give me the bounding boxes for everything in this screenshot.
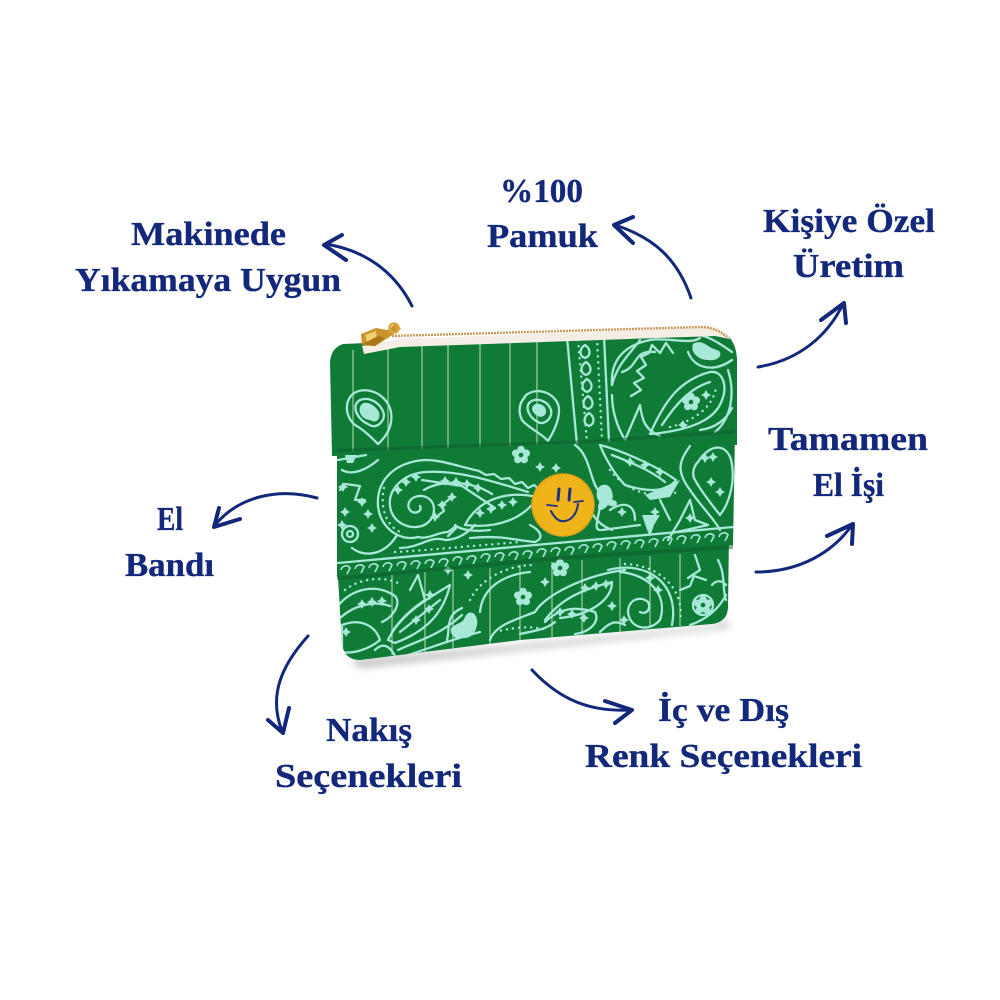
title: Kişiye Özel Üretim: Üretim: [793, 248, 904, 285]
arrow: to Nakış Seçenekleri: [268, 636, 308, 733]
right motifs: [575, 445, 733, 540]
zipper pull: [361, 323, 401, 346]
arrow: to %100 Pamuk: [614, 217, 691, 298]
title: İç ve Dış Renk Seçenekleri: Renk Seçenekleri: [585, 738, 862, 775]
title: Makinede Yıkamaya Uygun: Yıkamaya Uygun: [75, 262, 341, 299]
title: İç ve Dış Renk Seçenekleri: İç ve Dış: [658, 691, 789, 729]
leaf motif: [436, 495, 537, 536]
title: %100 Pamuk: %100: [500, 173, 583, 210]
arrow: to İç ve Dış Renk Seçenekleri: [532, 670, 632, 723]
title: %100 Pamuk: Pamuk: [487, 218, 598, 255]
embroidered smiley patch: [532, 474, 594, 536]
title: El Bandı: [125, 501, 214, 584]
arrow: to Makinede Yıkamaya Uygun: [324, 235, 412, 306]
title: Kişiye Özel Üretim: Kişiye Özel: [763, 203, 935, 240]
title: İç ve Dış Renk Seçenekleri: [585, 691, 862, 775]
title: El Bandı: El: [157, 501, 183, 538]
title: Nakış Seçenekleri: Nakış: [326, 712, 412, 749]
large paisley with spiral: [378, 460, 540, 538]
title: Makinede Yıkamaya Uygun: Makinede: [131, 216, 286, 253]
arrow: to El Bandı: [214, 494, 317, 527]
lower pocket: [337, 535, 729, 660]
title: Tamamen El İşi: El İşi: [813, 466, 884, 504]
title: Nakış Seçenekleri: Seçenekleri: [275, 758, 462, 795]
title: Nakış Seçenekleri: [275, 712, 462, 795]
title: Tamamen El İşi: [768, 421, 928, 504]
title: El Bandı: Bandı: [125, 547, 214, 584]
arrow: to Kişiye Özel Üretim: [758, 303, 846, 367]
title: Tamamen El İşi: Tamamen: [768, 421, 928, 458]
product: green bandana wallet: [330, 323, 737, 668]
zipper tape: [362, 327, 730, 354]
chain border: [338, 527, 733, 563]
title: Kişiye Özel Üretim: [763, 203, 935, 285]
title: %100 Pamuk: [487, 173, 598, 255]
arrow: to Tamamen El İşi: [756, 524, 853, 572]
front band: [337, 430, 735, 580]
left motifs: [337, 455, 475, 554]
title: Makinede Yıkamaya Uygun: [75, 216, 341, 299]
zipper teeth: [392, 327, 727, 337]
back panel with zipper: [330, 323, 737, 456]
